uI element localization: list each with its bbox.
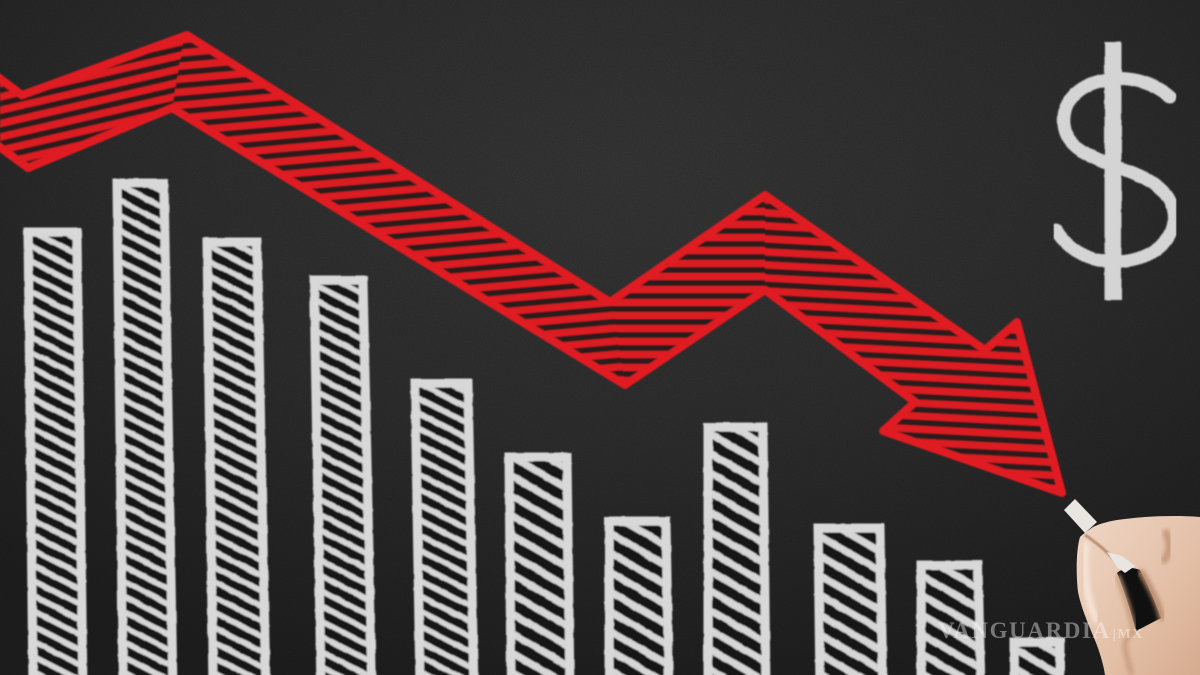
bar 3 (207, 242, 266, 675)
chalk stick (1064, 499, 1097, 533)
icon: chalk dollar sign (1056, 42, 1174, 300)
watermark: VANGUARDIA|MX (938, 618, 1144, 643)
bar 10 (921, 565, 981, 675)
arrow outline (0, 35, 1062, 493)
bar 11 (1014, 642, 1060, 675)
bar 1 (28, 232, 83, 675)
chalk in fingers (1107, 552, 1135, 573)
bar 2 (117, 183, 173, 675)
bar 9 (818, 528, 883, 675)
finger creases and shading (1085, 535, 1118, 564)
bar 5 (415, 383, 474, 675)
arrow hatching (0, 20, 1065, 500)
bar chart: white chalk bars (28, 183, 1060, 675)
hand (1077, 516, 1200, 675)
gap between fingers (1117, 568, 1161, 631)
red falling arrow (0, 20, 1065, 500)
bar 6 (509, 457, 570, 675)
bar 4 (314, 280, 372, 675)
bar 7 (609, 521, 669, 675)
icon: hand holding chalk (1064, 499, 1200, 675)
thumb highlight (1085, 545, 1096, 620)
bar 8 (708, 427, 766, 675)
